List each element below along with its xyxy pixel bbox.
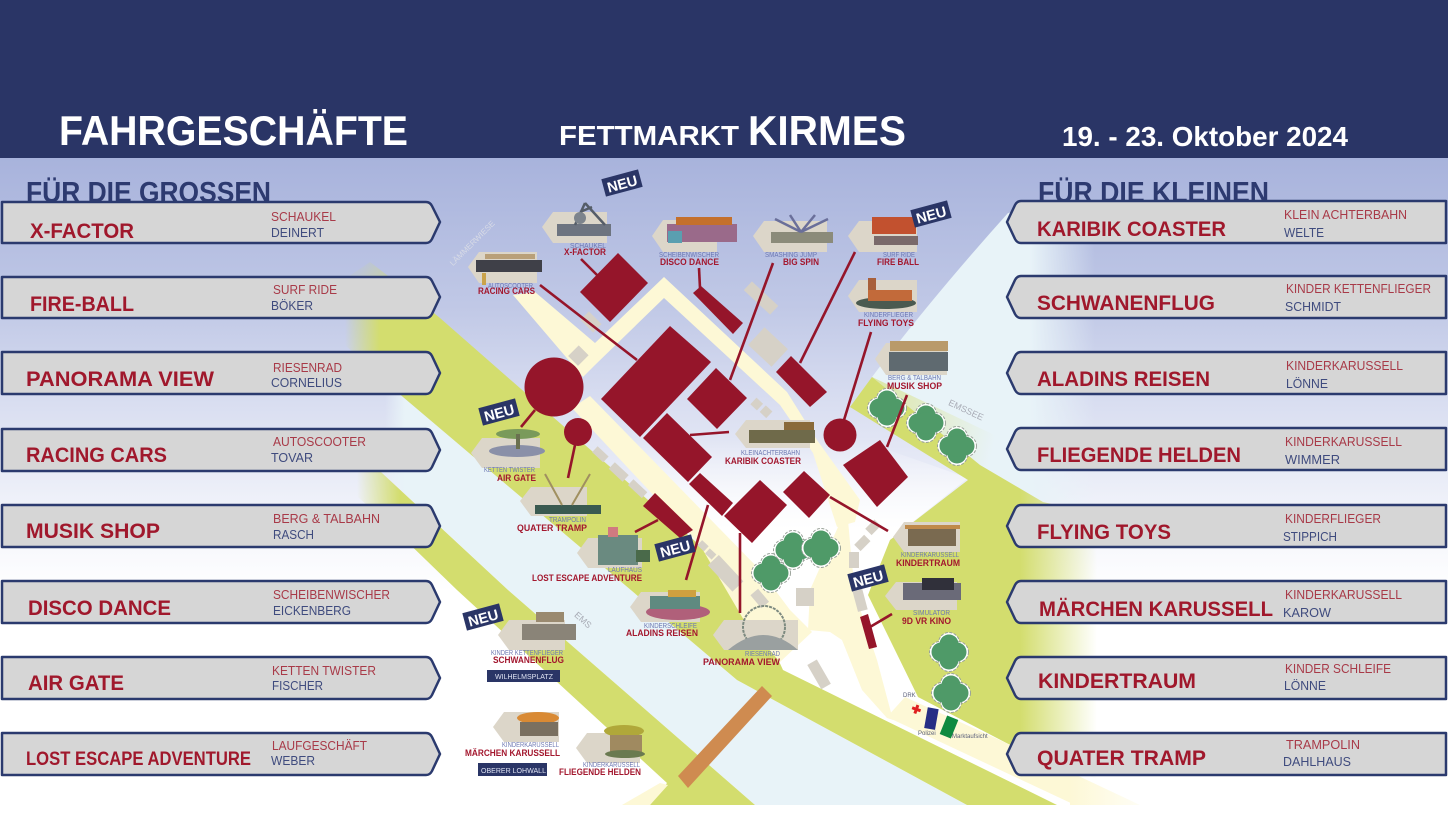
water and area labels: EMS [572, 610, 594, 630]
ride marker: Märchen Karussell: KINDERKARUSSELL [502, 742, 559, 749]
white festival ground [590, 400, 1140, 805]
ride marker: Disco Dance: SCHEIBENWISCHER [659, 252, 719, 259]
new badges: NEU [467, 607, 500, 631]
row: Air Gate: KETTEN TWISTER [272, 664, 376, 678]
ride marker: Big Spin: BIG SPIN [783, 257, 819, 267]
row: Kindertraum: KINDER SCHLEIFE [1285, 662, 1391, 676]
row: Fliegende Helden [1007, 428, 1446, 470]
ride marker: Flying Toys: FLYING TOYS [858, 318, 914, 328]
row: Fliegende Helden: FLIEGENDE HELDEN [1037, 444, 1241, 467]
row: Lost Escape Adventure [2, 733, 440, 775]
green bank right [850, 377, 1100, 780]
row: Racing Cars: RACING CARS [26, 444, 167, 467]
ride marker: Air Gate [471, 429, 545, 483]
row: Karibik Coaster: WELTE [1284, 226, 1324, 240]
ride marker: X-Factor: SCHAUKEL [570, 243, 606, 250]
water and area labels: LÄMMERWIESE [448, 219, 497, 268]
ride marker: Schwanenflug: SCHWANENFLUG [493, 655, 564, 665]
location label: Oberer Lohwall: OBERER LOHWALL [481, 768, 546, 775]
ride marker: Disco Dance [652, 217, 737, 267]
row: Racing Cars: AUTOSCOOTER [273, 435, 366, 449]
new badges: NEU [659, 538, 692, 562]
ride marker: Disco Dance: DISCO DANCE [660, 257, 719, 267]
row: Musik Shop: MUSIK SHOP [26, 520, 160, 543]
row: Aladins Reisen [1007, 352, 1446, 394]
ride marker: Musik Shop: BERG & TALBAHN [888, 375, 941, 382]
river [383, 383, 967, 805]
row: Kindertraum: KINDERTRAUM [1038, 670, 1196, 693]
row: Fire-Ball: BÖKER [271, 299, 313, 313]
heading: für die Großen: FÜR DIE GROSSEN [26, 176, 271, 209]
row: Karibik Coaster: KARIBIK COASTER [1037, 218, 1226, 241]
row: Schwanenflug: KINDER KETTENFLIEGER [1286, 282, 1431, 296]
service points: DRK, Polizei, Marktaufsicht: Polizei [918, 731, 936, 737]
row: Märchen Karussell: MÄRCHEN KARUSSELL [1039, 598, 1273, 621]
row: Kindertraum [1007, 657, 1446, 699]
ride marker: Karibik Coaster: KARIBIK COASTER [725, 456, 801, 466]
row: Karibik Coaster [1007, 201, 1446, 243]
ride footprints [524, 253, 908, 649]
ride marker: Aladins Reisen: ALADINS REISEN [626, 628, 698, 638]
ride marker: Big Spin [753, 215, 833, 267]
row: Racing Cars [2, 429, 440, 471]
row: Aladins Reisen: KINDERKARUSSELL [1286, 359, 1403, 373]
location label: Oberer Lohwall [478, 763, 547, 776]
tan stall blocks [568, 281, 881, 689]
ride marker: Fire Ball [848, 217, 919, 267]
ride marker: Racing Cars [468, 252, 542, 296]
ride marker: Quater Tramp: TRAMPOLIN [549, 517, 586, 524]
ride marker: Air Gate: AIR GATE [497, 473, 536, 483]
green bank middle [345, 279, 1057, 805]
ride marker: Panorama View: PANORAMA VIEW [703, 657, 780, 667]
new badges: NEU [483, 402, 516, 426]
row: X-Factor: DEINERT [271, 226, 324, 240]
ride marker: Schwanenflug: KINDER KETTENFLIEGER [491, 650, 563, 657]
ride marker: Märchen Karussell [465, 712, 560, 758]
ride marker: 9D VR Kino [885, 578, 961, 626]
row: Fliegende Helden: KINDERKARUSSELL [1285, 435, 1402, 449]
row: Karibik Coaster: KLEIN ACHTERBAHN [1284, 208, 1407, 222]
row: Schwanenflug: SCHMIDT [1285, 300, 1341, 314]
ride marker: Schwanenflug [491, 612, 576, 665]
ride marker: Flying Toys [848, 278, 917, 328]
row: Märchen Karussell: KINDERKARUSSELL [1285, 588, 1402, 602]
row: Schwanenflug [1007, 276, 1446, 318]
ride marker: 9D VR Kino: SIMULATOR [913, 610, 950, 617]
water and area labels: EMSSEE [947, 398, 985, 422]
ride marker: X-Factor [542, 203, 611, 257]
row: Lost Escape Adventure: LAUFGESCHÄFT [272, 739, 367, 753]
green bank lower [350, 445, 755, 805]
row: Panorama View [2, 352, 440, 394]
ride marker: Fliegende Helden: KINDERKARUSSELL [583, 762, 640, 769]
ride marker: Lost Escape Adventure: LOST ESCAPE ADVENTURE [532, 573, 642, 583]
row: Quater Tramp [1007, 733, 1446, 775]
panel: left list [2, 202, 440, 775]
trees [752, 388, 976, 712]
ride marker: Märchen Karussell: MÄRCHEN KARUSSELL [465, 748, 560, 758]
row: Aladins Reisen: LÖNNE [1286, 377, 1328, 391]
row: Musik Shop [2, 505, 440, 547]
title: Fahrgeschäfte: FAHRGESCHÄFTE [59, 107, 408, 154]
row: Fire-Ball [2, 277, 440, 318]
ride marker: Racing Cars: AUTOSCOOTER [488, 283, 533, 290]
row: Panorama View: RIESENRAD [273, 361, 342, 375]
row: Quater Tramp: TRAMPOLIN [1286, 738, 1360, 752]
ride marker: Aladins Reisen [626, 590, 710, 638]
row: Musik Shop: RASCH [273, 528, 314, 542]
ride marker: Panorama View: RIESENRAD [745, 651, 780, 658]
bridge [678, 686, 772, 788]
new badges: NEU [852, 568, 885, 592]
ride marker: Fliegende Helden: FLIEGENDE HELDEN [559, 767, 641, 777]
ride marker: Karibik Coaster [725, 420, 815, 466]
row: Kindertraum: LÖNNE [1284, 679, 1326, 693]
service points: DRK, Polizei, Marktaufsicht: Marktaufsicht [952, 734, 988, 740]
row: X-Factor: SCHAUKEL [271, 210, 336, 224]
new badges: NEU [915, 204, 948, 228]
ride marker: Big Spin: SMASHING JUMP [765, 252, 817, 259]
ride marker: Kindertraum: KINDERKARUSSELL [901, 552, 959, 559]
row: Quater Tramp: QUATER TRAMP [1037, 747, 1206, 770]
location label: Wilhelmsplatz [487, 670, 560, 682]
row: Air Gate [2, 657, 440, 699]
location label: Wilhelmsplatz: WILHELMSPLATZ [495, 674, 554, 681]
row: Disco Dance: SCHEIBENWISCHER [273, 588, 390, 602]
title: Fettmarkt Kirmes: KIRMES [748, 107, 906, 154]
title: Fettmarkt Kirmes: FETTMARKT [559, 120, 739, 151]
ride marker: X-Factor: X-FACTOR [564, 247, 606, 257]
row: Fire-Ball: FIRE-BALL [30, 293, 134, 316]
header band [0, 0, 1448, 158]
ride marker: Kindertraum: KINDERTRAUM [896, 558, 960, 568]
row: Racing Cars: TOVAR [271, 451, 313, 465]
row: Aladins Reisen: ALADINS REISEN [1037, 368, 1210, 391]
ride marker: Quater Tramp: QUATER TRAMP [517, 523, 587, 533]
lake: Emssee [872, 200, 1100, 505]
row: Air Gate: FISCHER [272, 679, 323, 693]
row: Lost Escape Adventure: WEBER [271, 754, 315, 768]
row: X-Factor: X-FACTOR [30, 220, 134, 243]
row: Fire-Ball: SURF RIDE [273, 283, 337, 297]
ride marker: Kindertraum [893, 522, 960, 568]
ride marker: Panorama View [703, 606, 798, 667]
ride marker: 9D VR Kino: 9D VR KINO [902, 616, 951, 626]
title: Fettmarkt Kirmes [559, 107, 906, 154]
row: Panorama View: PANORAMA VIEW [26, 368, 214, 391]
row: Flying Toys: FLYING TOYS [1037, 521, 1171, 544]
panel: right list [1007, 201, 1446, 775]
ride marker: Karibik Coaster: KLEINACHTERBAHN [741, 450, 800, 457]
ride marker: Aladins Reisen: KINDERSCHLEIFE [644, 623, 697, 630]
new badges [462, 169, 952, 632]
row: Panorama View: CORNELIUS [271, 376, 342, 390]
row: Märchen Karussell: KAROW [1283, 606, 1331, 620]
row: Quater Tramp: DAHLHAUS [1283, 755, 1351, 769]
row: Disco Dance: EICKENBERG [273, 604, 351, 618]
service points: DRK, Polizei, Marktaufsicht [903, 693, 988, 740]
green bank top tip [345, 262, 392, 279]
new badges: NEU [606, 173, 639, 197]
ride marker: Air Gate: KETTEN TWISTER [484, 467, 535, 474]
row: X-Factor [2, 202, 440, 243]
date: 19. - 23. Oktober 2024 [1062, 121, 1348, 152]
row: Musik Shop: BERG & TALBAHN [273, 512, 380, 526]
row: Air Gate: AIR GATE [28, 672, 124, 695]
ride marker: Racing Cars: RACING CARS [478, 286, 535, 296]
row: Flying Toys [1007, 505, 1446, 547]
water and area labels [448, 219, 985, 630]
row: Schwanenflug: SCHWANENFLUG [1037, 292, 1215, 315]
map base [345, 200, 1140, 805]
ride marker: Musik Shop [875, 341, 948, 391]
connector lines [521, 252, 907, 627]
cream roads [513, 277, 1140, 805]
pale green fade of the Emssee bank [872, 377, 1020, 480]
service points: DRK, Polizei, Marktaufsicht: DRK [903, 693, 916, 699]
ride marker: Fire Ball: FIRE BALL [877, 257, 919, 267]
ride marker: Fire Ball: SURF RIDE [883, 252, 915, 259]
row: Flying Toys: KINDERFLIEGER [1285, 512, 1381, 526]
row: Lost Escape Adventure: LOST ESCAPE ADVENTURE [26, 749, 251, 770]
row: Flying Toys: STIPPICH [1283, 530, 1337, 544]
ride marker: Flying Toys: KINDERFLIEGER [864, 312, 913, 319]
ride marker: Fliegende Helden [559, 725, 645, 777]
ride marker: Lost Escape Adventure [532, 527, 650, 583]
ride marker: Musik Shop: MUSIK SHOP [887, 381, 942, 391]
heading: für die Kleinen: FÜR DIE KLEINEN [1038, 176, 1269, 209]
ride marker: Quater Tramp [517, 474, 601, 533]
row: Märchen Karussell [1007, 581, 1446, 623]
ride marker: Lost Escape Adventure: LAUFHAUS [608, 567, 642, 574]
row: Disco Dance: DISCO DANCE [28, 597, 171, 620]
row: Disco Dance [2, 581, 440, 623]
row: Fliegende Helden: WIMMER [1285, 453, 1340, 467]
